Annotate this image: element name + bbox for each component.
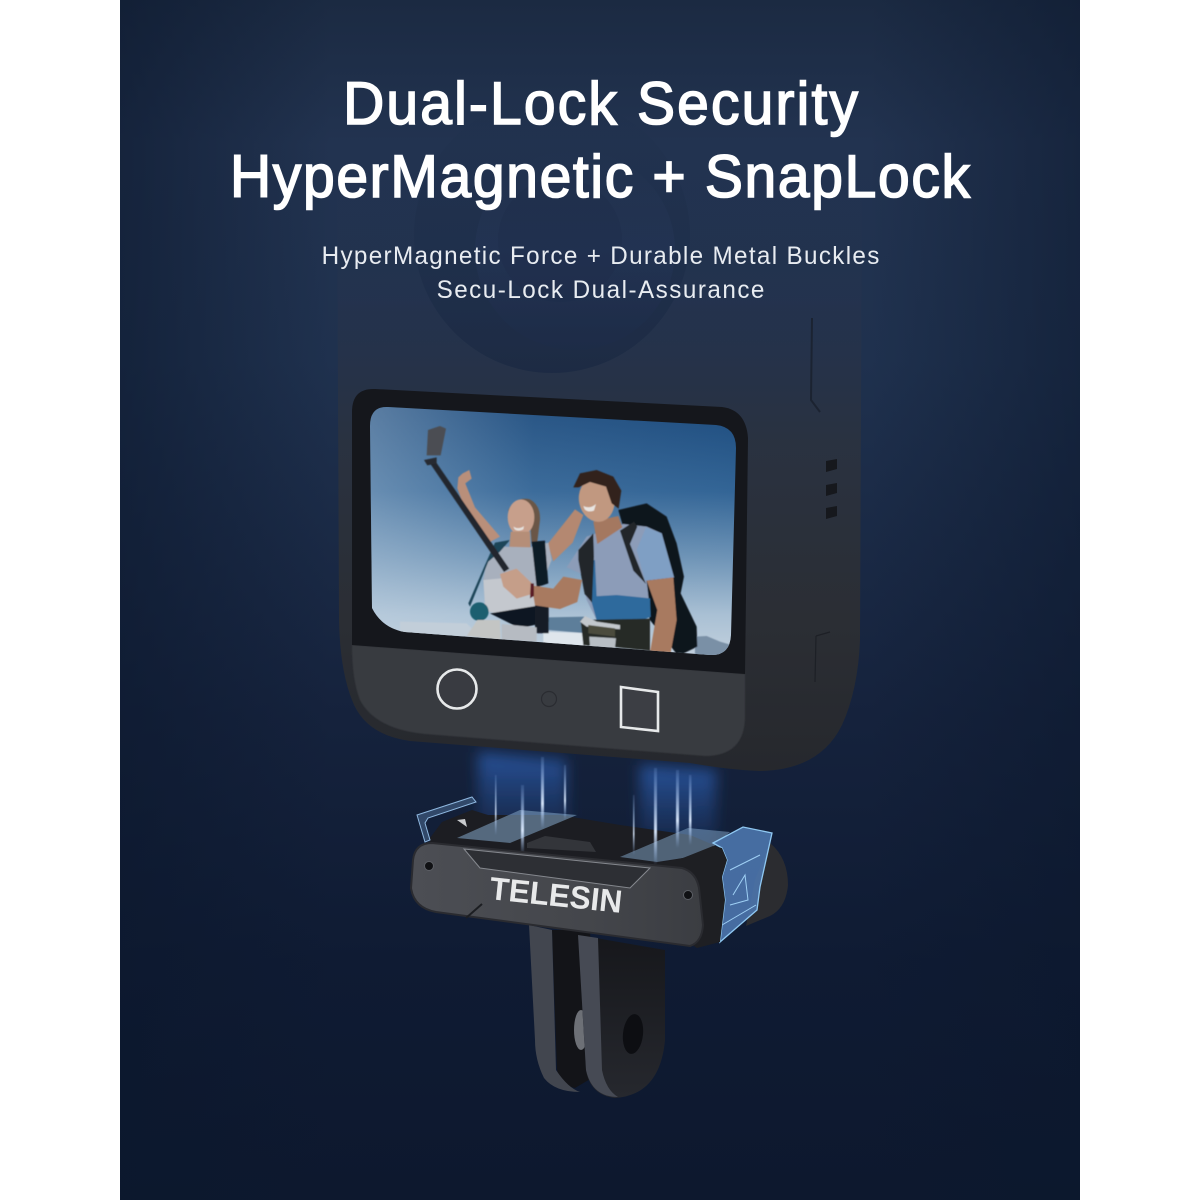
subtitle: Secu-Lock Dual-Assurance [437, 277, 764, 304]
sky [365, 400, 740, 662]
magnetic light beams [478, 752, 716, 860]
lower notch [466, 904, 482, 918]
infographic canvas [120, 0, 1080, 1200]
page background panel [120, 0, 1080, 1200]
selfie stick [424, 426, 509, 572]
translucent right plate [620, 828, 730, 862]
right rear block [746, 843, 788, 926]
mount end block [655, 846, 727, 948]
small latch highlight [457, 819, 467, 827]
TELESIN logo: TELESIN [488, 870, 624, 920]
title [230, 71, 971, 210]
translucent left plate [457, 810, 577, 843]
subtitle: HyperMagnetic Force + Durable Metal Buckles [322, 243, 879, 270]
port door [815, 632, 830, 682]
microphone dot [542, 692, 556, 706]
neck [593, 516, 622, 544]
right translucent clip [713, 827, 772, 942]
title: Dual-Lock Security [343, 71, 859, 137]
carriage slot [527, 836, 596, 852]
screws [424, 862, 692, 900]
arms and hand [532, 577, 582, 609]
camera front control strip [352, 645, 745, 756]
straps [578, 533, 594, 603]
people drawn in 3x local coordinates [400, 426, 737, 663]
ball pivot [574, 1010, 588, 1050]
light rays [495, 757, 692, 866]
subtitle [322, 243, 879, 304]
title: HyperMagnetic + SnapLock [230, 144, 971, 210]
TELESIN magnetic mount [411, 757, 788, 1098]
camera body [337, 170, 862, 771]
waist and shorts [581, 619, 650, 651]
bevel panel [464, 849, 650, 888]
speaker slots [826, 459, 837, 519]
distant sea, cloud and mountain [400, 616, 730, 655]
backpack [618, 503, 697, 656]
right prong with hole [578, 935, 665, 1098]
record button [438, 670, 476, 708]
woman [457, 470, 583, 642]
left clip outline [417, 797, 476, 842]
head and hair [578, 481, 615, 522]
screen photo [365, 400, 740, 663]
screen bezel [352, 389, 748, 674]
t-shirt [567, 524, 674, 624]
camera lens [414, 97, 690, 373]
side button [811, 318, 820, 412]
left prong [529, 925, 580, 1092]
man [500, 470, 697, 656]
top dark carriage [430, 810, 722, 880]
rear dark prong [552, 930, 597, 1088]
action camera [338, 318, 861, 771]
mount body [411, 843, 703, 946]
mode button [621, 687, 658, 731]
